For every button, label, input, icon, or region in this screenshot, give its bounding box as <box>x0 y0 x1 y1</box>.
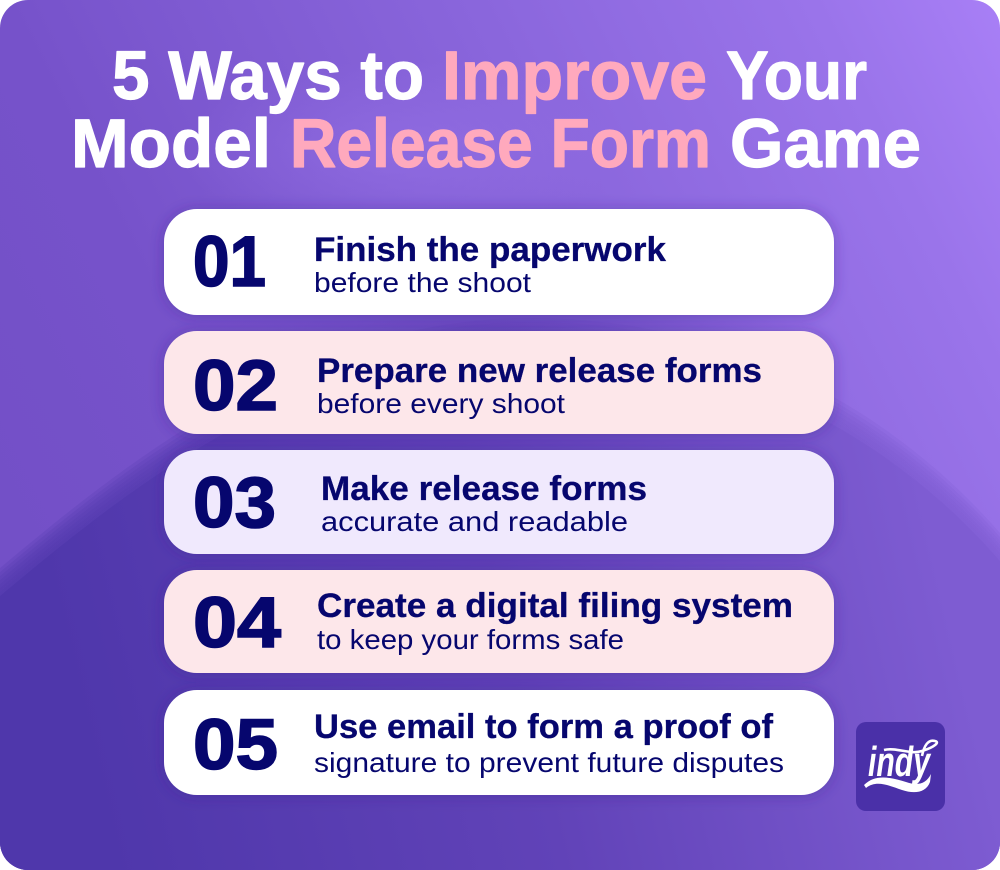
panel: step 04: to keep your forms safe <box>317 624 624 655</box>
panel: step 05 <box>164 690 834 795</box>
panel: step 03: 03 <box>193 464 276 543</box>
title: Release Form <box>290 105 711 182</box>
icon: indy logo: indy <box>868 738 932 785</box>
panel: step 04: 04 <box>193 584 282 663</box>
panel: step 02: Prepare new release forms <box>317 352 762 390</box>
panel: step 01 <box>164 209 834 315</box>
title <box>71 37 921 182</box>
panel: step 02: 02 <box>193 347 278 426</box>
panel: step 04: Create a digital filing system <box>317 587 793 625</box>
title: Model <box>71 105 271 182</box>
panel: step 04 <box>164 570 834 673</box>
title: 5 Ways to <box>112 37 424 114</box>
panel: step 03 <box>164 450 834 554</box>
panel: step 05: 05 <box>193 706 278 785</box>
panel: step 05: Use email to form a proof of <box>314 708 774 746</box>
panel: step 03: Make release forms <box>321 470 647 508</box>
title: Improve <box>442 37 707 114</box>
panel: step 05: signature to prevent future disputes <box>314 747 784 778</box>
panel: step 02: before every shoot <box>317 388 565 419</box>
title: Game <box>730 105 921 182</box>
title: Your <box>726 37 867 114</box>
panel: step 01: 01 <box>193 223 266 302</box>
icon: indy logo <box>856 722 945 811</box>
panel: step 03: accurate and readable <box>321 506 628 537</box>
panel: step 01: before the shoot <box>314 267 531 298</box>
panel: step 02 <box>164 331 834 434</box>
panel: step 01: Finish the paperwork <box>314 231 666 269</box>
